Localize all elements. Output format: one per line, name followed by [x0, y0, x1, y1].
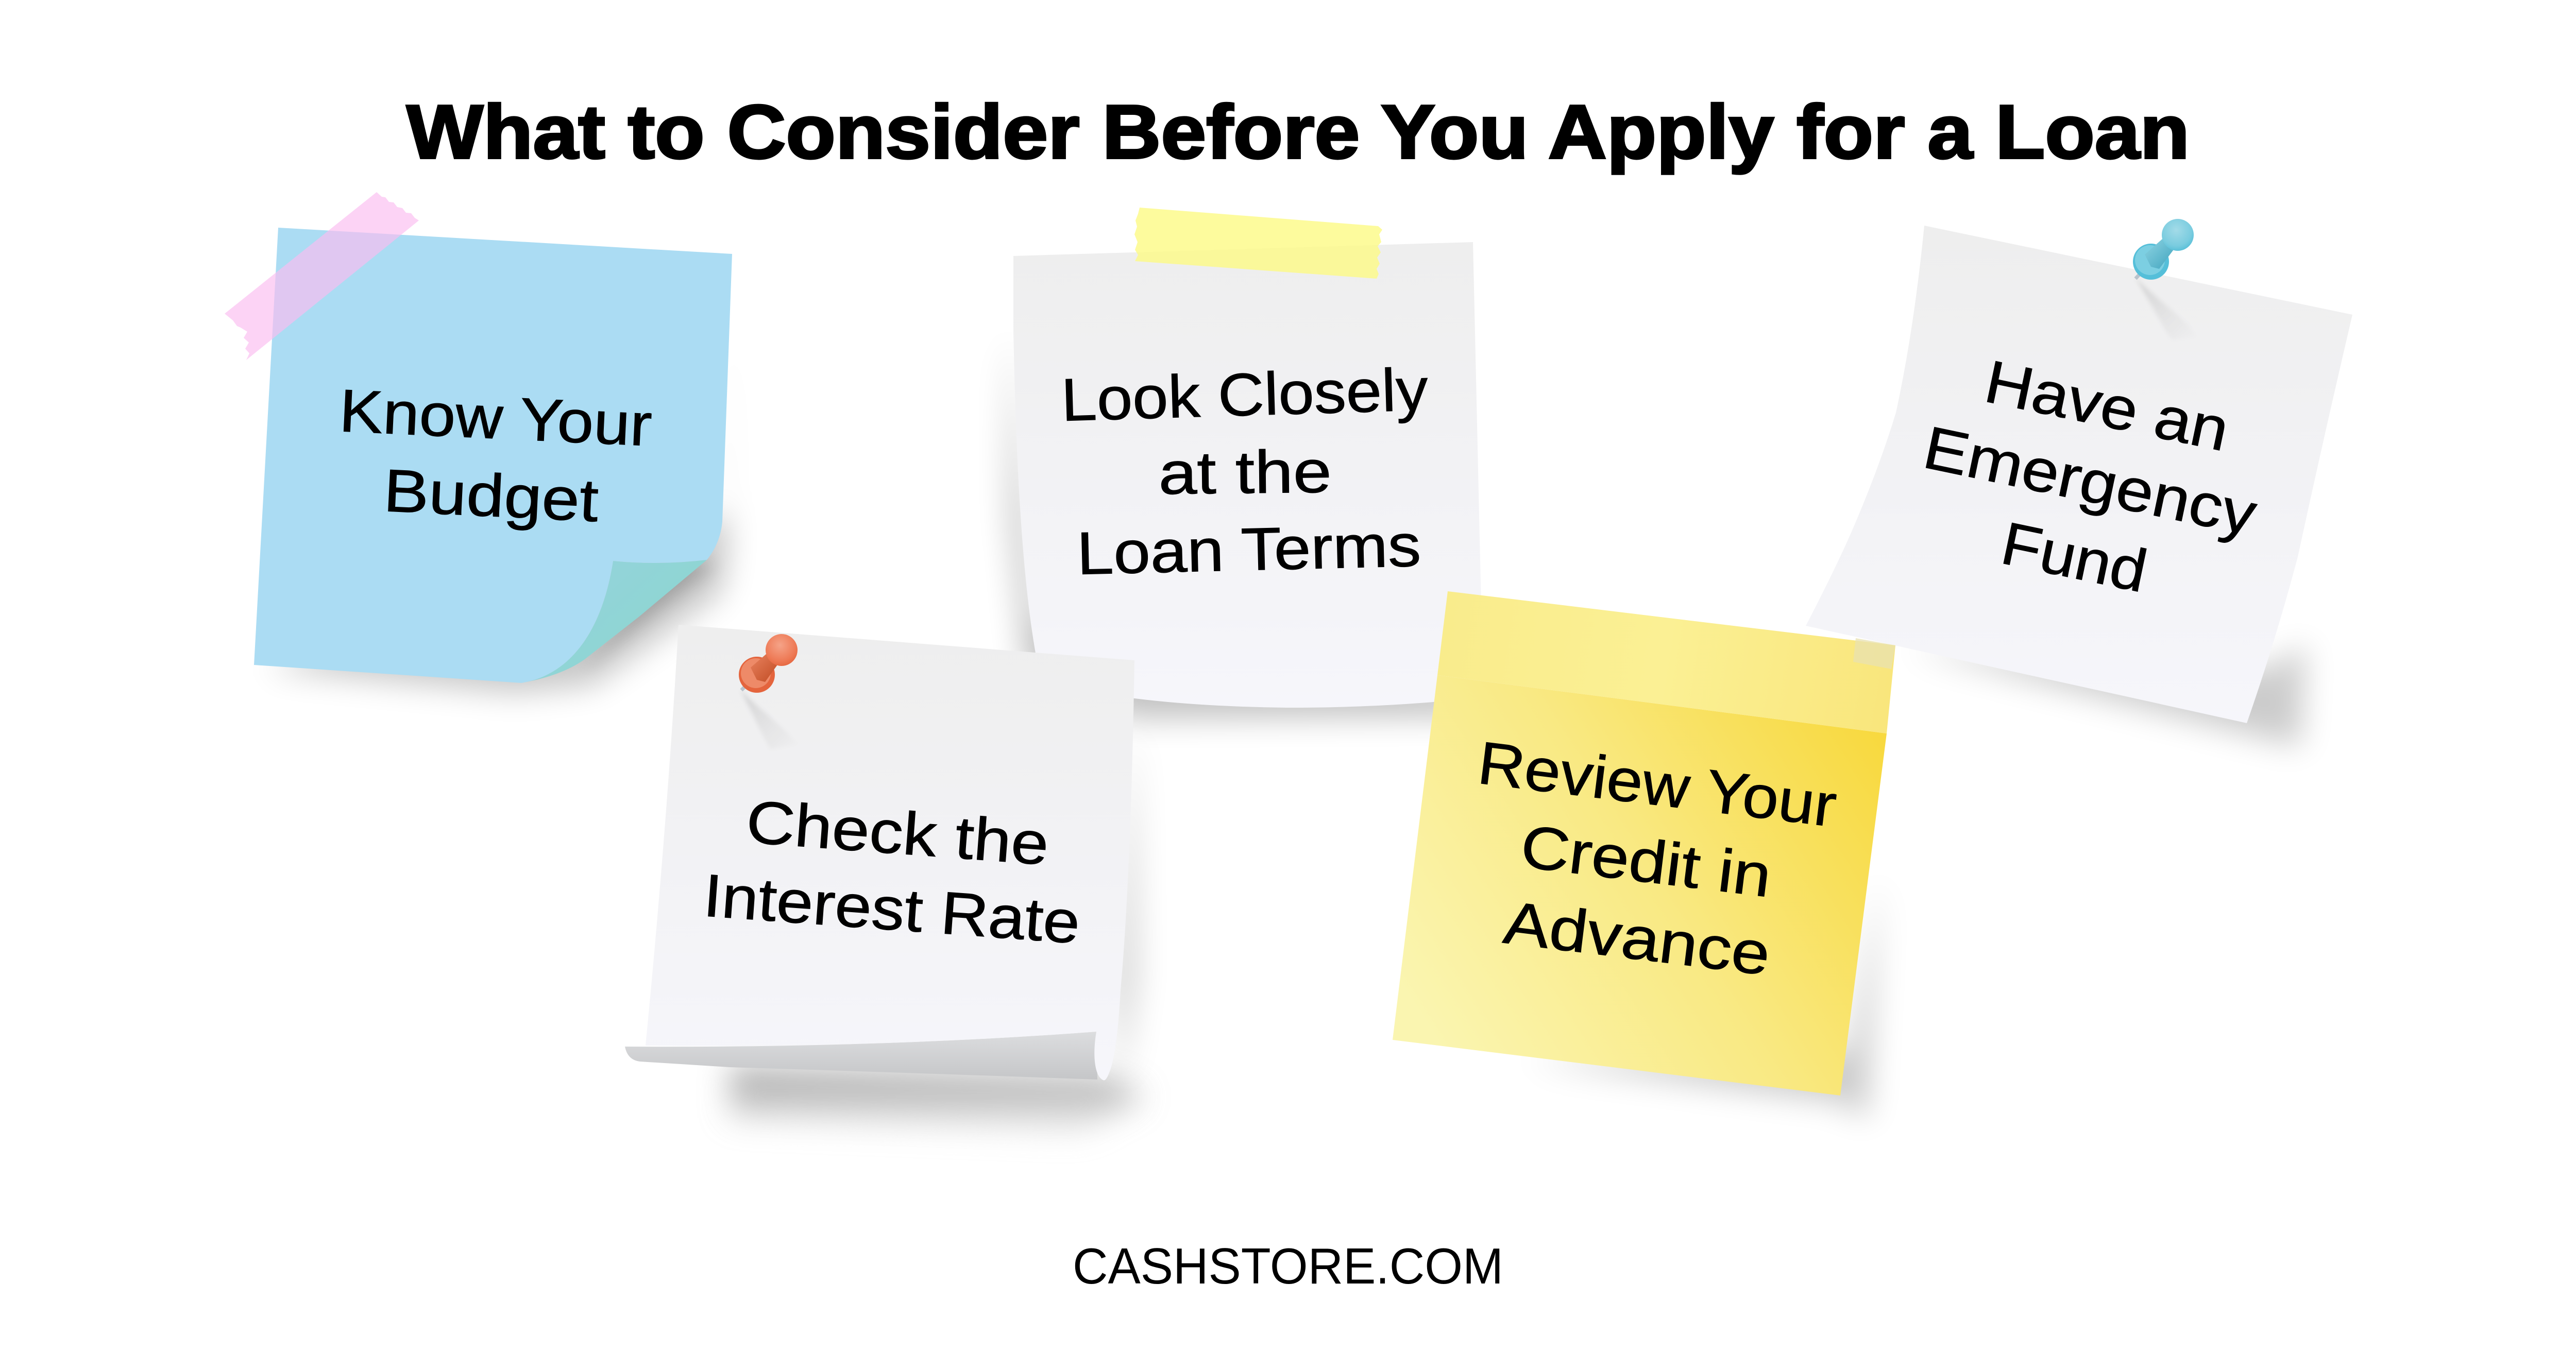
text: have an emergency fund: Emergency: [1918, 413, 2262, 549]
blue sticky sheet: [254, 228, 732, 683]
yellow sticky sheet: [1393, 675, 1887, 1096]
text: review your credit in advance: Advance: [1500, 888, 1774, 988]
text: look closely at the loan terms: at the: [1158, 437, 1332, 507]
panel: look closely at the loan terms: [1007, 208, 1484, 718]
text: know your budget: [338, 376, 653, 534]
text: check the interest rate: [701, 788, 1082, 956]
text: look closely at the loan terms: Loan Terms: [1076, 511, 1421, 587]
panel: have an emergency fund: [1806, 219, 2352, 747]
pink tape: [225, 192, 419, 360]
text: have an emergency fund: Have an: [1979, 347, 2235, 464]
panel: check the interest rate: [625, 625, 1146, 1131]
text: check the interest rate: Check the: [744, 788, 1051, 878]
icon: orange push pin: [739, 634, 798, 693]
curled bottom band: [625, 1032, 1097, 1080]
text: review your credit in advance: Credit in: [1517, 812, 1775, 910]
pin shadow: [740, 690, 799, 749]
text: review your credit in advance: [1475, 729, 1840, 988]
text: have an emergency fund: [1918, 347, 2262, 605]
grey paper sheet: [1806, 226, 2352, 723]
text: have an emergency fund: Fund: [1996, 509, 2153, 605]
text: know your budget: Know Your: [338, 376, 653, 459]
panel: know your budget: [225, 192, 738, 693]
icon: blue push pin: [2133, 219, 2194, 280]
page curl: [521, 560, 707, 683]
text: check the interest rate: Interest Rate: [701, 861, 1082, 956]
yellow adhesive band: [1437, 591, 1895, 733]
text: review your credit in advance: Review Your: [1475, 729, 1840, 840]
panel: review your credit in advance: [1393, 591, 1895, 1120]
title: What to Consider Before You Apply for a Loan: [406, 90, 2190, 175]
text: look closely at the loan terms: Look Closely: [1060, 355, 1429, 434]
yellow tape: [1134, 208, 1382, 279]
grey paper sheet: [1013, 242, 1483, 708]
grey paper sheet: [646, 625, 1134, 1081]
text: know your budget: Budget: [382, 456, 600, 534]
text: look closely at the loan terms: [1060, 355, 1429, 587]
pin shadow: [2136, 278, 2197, 340]
translucent overlap corner: [1853, 638, 1895, 669]
footer website: CASHSTORE.COM: [1073, 1238, 1503, 1294]
